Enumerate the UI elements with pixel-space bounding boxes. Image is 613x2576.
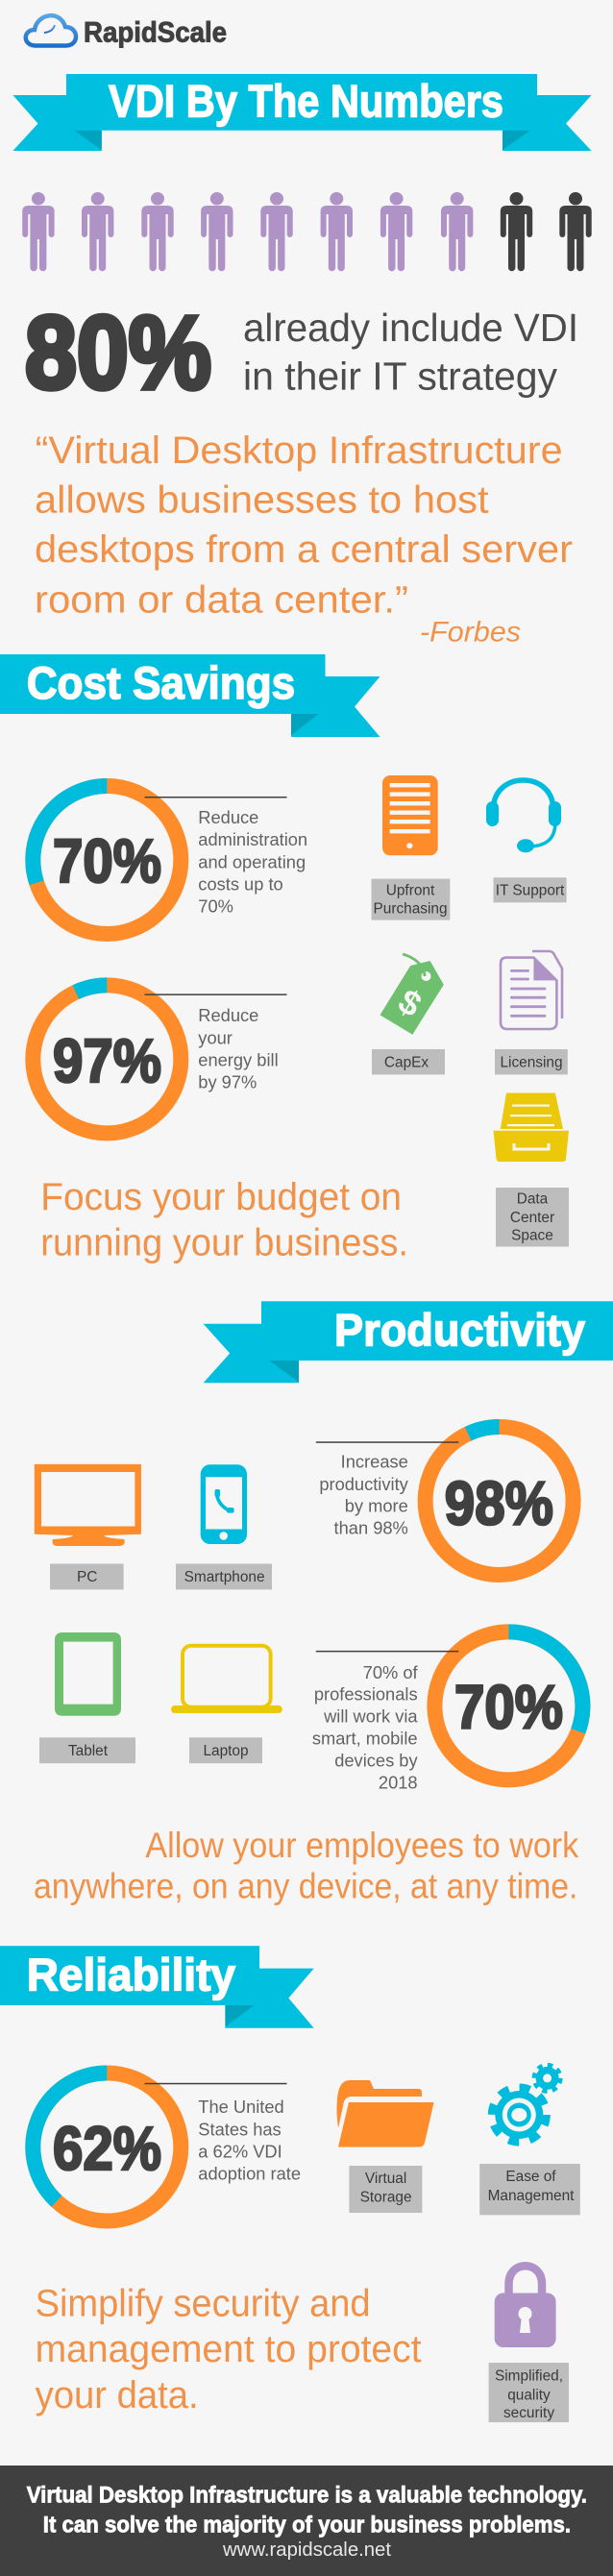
label: PC [50,1564,124,1589]
quote [35,429,573,648]
label: Ease of Management: Ease of [505,2169,556,2185]
label: Upfront Purchasing: Upfront [386,882,435,899]
label: IT Support [494,877,567,902]
donut: 70%: 70% [53,826,161,895]
callout: mobile professionals: devices by [334,1751,418,1771]
donut: 97% [33,985,181,1133]
callout: mobile professionals: will work via [323,1706,418,1727]
donut: 70% [33,786,181,934]
takeaway: productivity: Allow your employees to work [145,1826,579,1865]
takeaway: cost savings [40,1176,408,1264]
section banner: Reliability [0,1946,314,2028]
quote: allows businesses to host [35,478,489,521]
donut: 62% [33,2073,181,2221]
quote: room or data center.” [35,578,408,621]
callout: increase productivity: Increase [341,1451,408,1471]
icon: data center drawer [494,1093,569,1162]
callout: reduce administration: administration [198,829,307,849]
quote: “Virtual Desktop Infrastructure [36,429,563,472]
label: Upfront Purchasing [371,879,450,920]
takeaway: cost savings: Focus your budget on [40,1176,402,1218]
takeaway: reliability: your data. [36,2374,199,2417]
icon: folder [337,2080,434,2147]
stat: 80%: 80% [25,294,211,410]
logo: RapidScale [26,15,227,48]
label: Virtual Storage: Storage [360,2189,412,2205]
callout: adoption rate: The United [198,2097,284,2117]
label: Licensing [495,1049,568,1074]
callout: reduce administration [144,797,307,916]
label: Simplified, quality security [489,2363,569,2422]
stat description [243,306,578,398]
icon: CapEx price tag: $ [392,981,429,1024]
label: CapEx [372,1049,445,1074]
footer: Virtual Desktop Infrastructure is a valuable technology. [27,2483,587,2509]
label: Simplified, quality security: Simplified, [495,2368,563,2385]
heading: Productivity [334,1305,585,1356]
callout: increase productivity: productivity [319,1474,409,1494]
callout: increase productivity [316,1441,458,1537]
section banner: Productivity [204,1301,613,1383]
donut: 70% mobile [434,1631,582,1779]
title banner [12,74,592,151]
footer: www.rapidscale.net [222,2539,391,2561]
icon: IT support headset [486,780,561,852]
label: Upfront Purchasing: Purchasing [373,901,448,918]
takeaway: productivity [34,1826,579,1905]
donut: 70% mobile: 70% [454,1672,563,1741]
callout: adoption rate: States has [198,2119,282,2139]
callout: mobile professionals: 70% of [363,1662,419,1682]
callout: mobile professionals: smart, mobile [312,1729,418,1749]
label: IT Support: IT Support [496,882,565,899]
heading: Cost Savings [27,657,295,708]
icon: CapEx price tag [380,954,444,1035]
label: Licensing: Licensing [500,1055,563,1071]
icon: tablet [55,1632,121,1716]
quote: desktops from a central server [35,528,573,571]
label: Smartphone: Smartphone [184,1569,265,1585]
label: Virtual Storage: Virtual [365,2171,406,2187]
label: Simplified, quality security: security [503,2405,554,2421]
icon: licensing document [501,951,562,1029]
heading: Reliability [27,1950,235,2000]
callout: reduce administration: 70% [198,895,233,916]
icon: padlock [495,2266,556,2347]
callout: reduce energy bill: Reduce [198,1005,258,1025]
callout: adoption rate: a 62% VDI [198,2141,282,2161]
label: CapEx: CapEx [384,1055,429,1071]
callout: reduce administration: Reduce [198,807,258,827]
footer: It can solve the majority of your business problems. [43,2512,571,2538]
label: Tablet: Tablet [68,1743,109,1759]
donut: 97%: 97% [53,1026,161,1095]
footer [0,2466,613,2576]
callout: increase productivity: by more [345,1495,408,1515]
callout: mobile professionals [312,1651,458,1793]
icon: PC monitor [35,1464,141,1546]
pictogram: 8 of 10 people [22,192,592,271]
callout: reduce energy bill: by 97% [198,1071,257,1092]
callout: reduce energy bill: energy bill [198,1049,279,1069]
section banner: Cost Savings [0,654,380,737]
takeaway: cost savings: running your business. [40,1222,408,1264]
label: Tablet [39,1737,135,1763]
callout: reduce administration: and operating [198,851,306,871]
label: Ease of Management [479,2164,580,2215]
label: Data Center Space: Space [511,1228,553,1244]
label: Virtual Storage [349,2166,422,2213]
label: Ease of Management: Management [488,2188,575,2204]
takeaway: reliability [36,2282,422,2417]
donut: 98%: 98% [445,1468,553,1537]
callout: increase productivity: than 98% [334,1517,408,1537]
label: Data Center Space: Data [517,1190,549,1207]
callout: reduce energy bill [144,994,286,1092]
takeaway: reliability: management to protect [36,2328,422,2370]
callout: mobile professionals: 2018 [379,1773,418,1793]
label: Laptop: Laptop [203,1743,249,1759]
callout: reduce energy bill: your [198,1027,233,1047]
takeaway: productivity: anywhere, on any device, at any time. [34,1866,577,1905]
label: Data Center Space: Center [510,1210,554,1226]
quote source: -Forbes [420,616,521,648]
title text: VDI By The Numbers [109,75,503,126]
donut: 62%: 62% [53,2114,161,2183]
icon: smartphone [201,1464,247,1544]
icon: laptop [171,1646,282,1713]
label: Data Center Space [496,1188,569,1247]
takeaway: reliability: Simplify security and [36,2282,371,2324]
callout: adoption rate: adoption rate [198,2163,301,2183]
icon: upfront purchasing tablet [382,775,438,855]
callout: mobile professionals: professionals [314,1684,418,1705]
donut: 98% [426,1427,574,1575]
stat description: in their IT strategy [243,354,557,398]
icon: cloud [26,15,76,46]
stat description: already include VDI [243,306,578,350]
label: PC: PC [77,1569,97,1585]
callout: reduce administration: costs up to [198,873,283,894]
label: Simplified, quality security: quality [507,2387,551,2403]
icon: gears [492,2065,560,2142]
callout: adoption rate [144,2083,301,2183]
label: Smartphone [176,1564,272,1589]
logo wordmark: RapidScale [84,16,227,48]
label: Laptop [189,1737,262,1763]
